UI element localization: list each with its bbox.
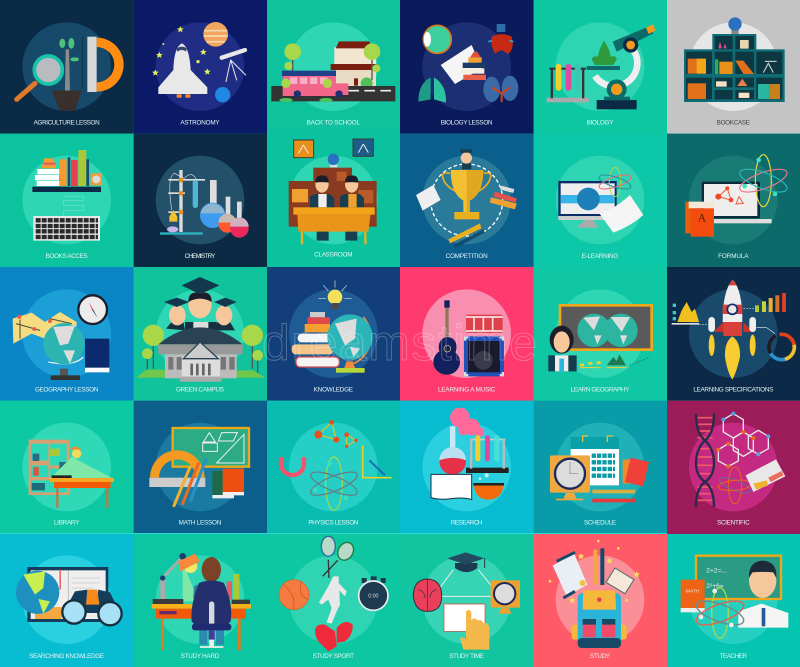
label: BOOKCASE [717, 120, 750, 127]
icon: open book [444, 604, 485, 631]
icon: open book and stack [441, 45, 486, 84]
icon: atom [598, 167, 632, 197]
panel: library [0, 401, 134, 534]
icon: blue book [85, 339, 109, 372]
panel: math lesson [134, 401, 267, 534]
icon: pencils [592, 490, 635, 502]
icon: globe [327, 314, 373, 373]
label: E-LEARNING [582, 253, 618, 260]
icon: pointing hand [460, 610, 489, 650]
watermark: dreamstime [262, 315, 537, 371]
icon: chalkboard: 2²+6= [706, 583, 724, 590]
icon: open book [599, 195, 643, 233]
icon: stopwatch: 0:00 [368, 594, 379, 600]
panel: biology lesson [400, 0, 534, 134]
panel: classroom [267, 134, 400, 267]
icon: desk [293, 207, 375, 244]
panel: bookcase [667, 0, 800, 134]
icon: rackets [321, 536, 357, 578]
panel: learn geography [534, 267, 667, 401]
label: PHYSICS LESSON [308, 520, 359, 527]
label: KNOWLEDGE [314, 386, 353, 393]
icon: telescope [222, 50, 246, 82]
icon: wall shelves [29, 440, 69, 495]
label: BACK TO SCHOOL [307, 120, 360, 127]
icon: area chart [672, 302, 708, 325]
icon: book shelf [32, 150, 102, 192]
icon: stars [549, 540, 640, 603]
panel: study [534, 534, 667, 667]
icon: drum [466, 315, 503, 333]
icon: runner [319, 576, 347, 624]
panel: books access [0, 134, 134, 267]
icon: folded map [13, 312, 77, 344]
panel: schedule [534, 401, 667, 534]
label: STUDY TIME [449, 653, 484, 660]
panel: green campus [134, 267, 267, 401]
icon: rocket [708, 280, 756, 380]
icon: trees [284, 43, 380, 89]
label: SCIENTIFIC [717, 520, 750, 527]
icon: flask [439, 426, 466, 475]
icon: clock on monitor [491, 580, 520, 614]
icon: atom [694, 588, 746, 638]
icon: two students [310, 175, 364, 212]
icon: guitar [433, 300, 460, 375]
icon: open book [746, 459, 785, 492]
panel: physics lesson [267, 401, 400, 534]
icon: monitor [558, 181, 617, 228]
icon: bookcase [289, 168, 377, 227]
label: BIOLOGY [587, 120, 614, 127]
icon: atom [718, 467, 752, 504]
panel: research [400, 401, 534, 534]
label: SEARCHING KNOWLEDGE [29, 653, 104, 660]
icon: plant in pot [52, 38, 82, 111]
panel: agriculture lesson [0, 0, 134, 134]
icon: world board [560, 305, 652, 350]
panel: competition [400, 134, 534, 267]
icon: compass [78, 295, 107, 324]
icon: trees [136, 325, 265, 378]
panel: back to school [267, 0, 400, 134]
label: STUDY [590, 653, 611, 660]
icon: small charts [580, 354, 650, 368]
icon: scroll diploma [553, 552, 587, 598]
panel: astronomy [134, 0, 267, 134]
icon: bowl [473, 473, 504, 500]
icon: stack of books [292, 312, 339, 367]
icon: horseshoe magnet [281, 457, 304, 475]
icon: scroll and books [416, 185, 517, 248]
icon: protractor and ruler [149, 450, 205, 487]
label: STUDY SPORT [313, 653, 354, 660]
icon: space shuttle [158, 43, 207, 98]
label: GREEN CAMPUS [176, 386, 224, 393]
icon: clock on monitor [550, 455, 590, 500]
panel: knowledge [267, 267, 400, 401]
icon: pink smoke [450, 408, 484, 437]
icon: tablet [606, 568, 634, 594]
icon: open book [431, 474, 472, 500]
panel: searching knowledge [0, 533, 400, 667]
panel: geography lesson [0, 267, 134, 401]
label: CHEMISTRY [185, 253, 216, 260]
icon: light bulb [318, 280, 352, 309]
icon: binoculars [62, 590, 122, 625]
icon: books [212, 469, 244, 498]
label: BIOLOGY LESSON [441, 120, 493, 127]
icon: math book: MATH [686, 588, 700, 594]
label: GEOGRAPHY LESSON [35, 386, 99, 393]
icon: ruler and protractor [82, 37, 124, 92]
label: MATH LESSON [179, 520, 222, 527]
icon: pencils [174, 460, 206, 506]
icon: lab stand [160, 170, 205, 235]
icon: globe [328, 154, 339, 167]
icon: school building [331, 41, 377, 87]
panel: study hard [134, 534, 267, 667]
label: LEARNING SPECIFICATIONS [693, 386, 773, 393]
icon: framed pictures [294, 139, 373, 158]
label: CLASSROOM [314, 252, 352, 259]
icon: keyboard [33, 197, 100, 241]
label: FORMULA [718, 253, 749, 260]
panel: study time [400, 533, 667, 667]
icon: chalkboard [173, 428, 249, 467]
label: AGRICULTURE LESSON [34, 120, 100, 127]
icon: laptop [697, 182, 772, 223]
icon: eye [423, 25, 451, 53]
icon: kidneys [483, 76, 518, 102]
icon: calendar [571, 436, 619, 485]
icon: teal bookcase [684, 34, 785, 102]
icon: road [271, 86, 395, 102]
icon: desk [152, 604, 251, 650]
icon: teacher woman [548, 326, 577, 371]
icon: dna helix [696, 414, 714, 507]
icon: plant sample [592, 41, 617, 65]
icon: desk [50, 475, 114, 508]
icon: three graduates [164, 277, 237, 330]
icon: magnifier [17, 56, 62, 99]
label: SCHEDULE [584, 520, 616, 527]
icon: boxing gloves [315, 622, 353, 651]
icon: hexagon molecules [716, 412, 770, 468]
label: LIBRARY [54, 520, 80, 527]
icon: atom [737, 155, 790, 207]
label: COMPETITION [446, 253, 488, 260]
icon: atom [308, 457, 360, 510]
icon: graduation cap [447, 552, 485, 572]
panel: learning specifications [667, 267, 800, 401]
panel: scientific [667, 401, 800, 534]
icon: test tube [193, 180, 198, 208]
icon: earth [215, 87, 230, 102]
icon: student at chair [191, 557, 231, 647]
icon: brain [413, 579, 442, 611]
icon: donut chart [757, 328, 799, 364]
icon: lungs [418, 77, 446, 103]
icon: planet [203, 22, 228, 47]
icon: graduate figure [460, 149, 472, 169]
icon: axes [363, 445, 392, 478]
icon: red book with letter: A [698, 213, 707, 225]
icon: chalkboard [696, 556, 781, 599]
icon: open book [27, 567, 108, 622]
panel: formula [667, 134, 800, 267]
panel: study sport [267, 534, 400, 667]
icon: globe [728, 17, 742, 34]
icon: bus [281, 71, 348, 98]
icon: trophy [443, 170, 491, 219]
icon: microscope [587, 24, 655, 109]
icon: books on desk [227, 574, 250, 604]
icon: molecules [314, 420, 358, 448]
icon: test tube rack [547, 64, 589, 102]
label: ASTRONOMY [180, 120, 220, 127]
panel: e-learning [534, 134, 667, 267]
icon: stars [152, 26, 211, 76]
icon: backpack [572, 590, 627, 648]
label: LEARNING A MUSIC [438, 386, 496, 393]
icon: pens [593, 548, 604, 585]
icon: basketball [279, 580, 309, 610]
icon: flasks [200, 180, 249, 238]
icon: chalkboard: 2+2=... [706, 567, 727, 574]
panel: teacher [667, 534, 800, 667]
panel: chemistry [134, 134, 267, 267]
icon: campus building [158, 327, 243, 382]
icon: lamp and light [50, 447, 113, 479]
dashed ring [431, 164, 503, 236]
icon: globe [16, 571, 59, 614]
label: BOOKS ACCES [46, 253, 88, 260]
panel: biology [534, 0, 667, 134]
panel: learning a music [400, 267, 534, 401]
connector lines [433, 570, 500, 596]
icon: bar chart [743, 293, 786, 312]
icon: desk lamp [153, 553, 200, 604]
label: RESEARCH [451, 520, 483, 527]
icon: teacher man [738, 561, 788, 628]
icon: test tube rack [466, 435, 509, 473]
icon: amplifier [464, 336, 504, 376]
label: STUDY HARD [181, 653, 220, 660]
icon: globe [43, 323, 85, 380]
label: TEACHER [720, 653, 747, 660]
icon: heart [488, 24, 513, 54]
label: LEARN GEOGRAPHY [571, 386, 630, 393]
icon: red book [623, 458, 649, 486]
